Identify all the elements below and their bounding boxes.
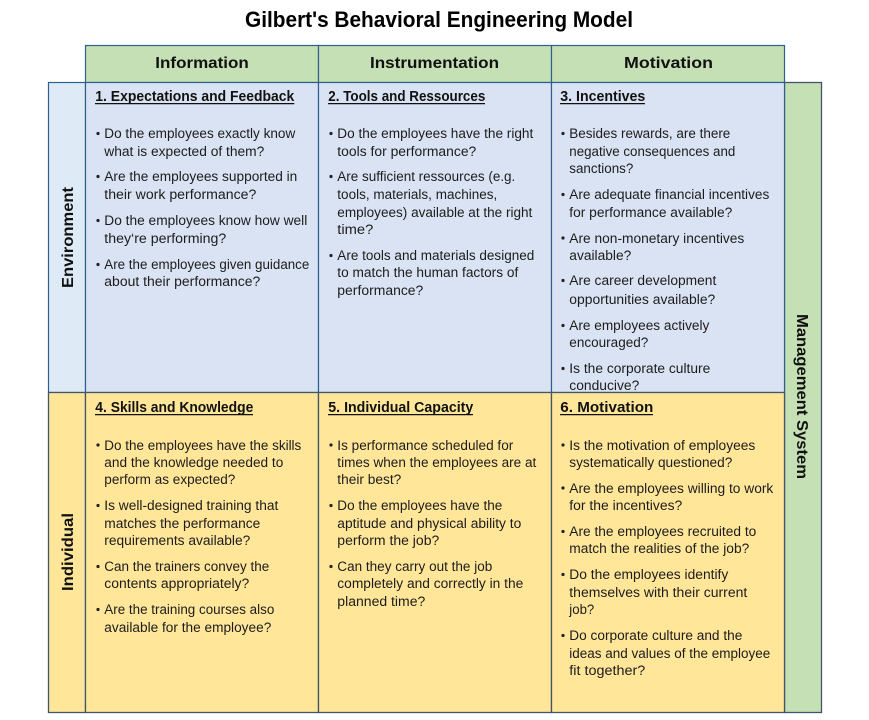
heading: cell 1: 1. Expectations and Feedback — [95, 89, 295, 105]
side header: Management System — [784, 82, 822, 712]
bullet list: cell 6: systematically questioned? — [569, 455, 732, 470]
bullet list: cell 6: Is the motivation of employees — [569, 438, 756, 453]
bullet list: cell 4: requirements available? — [104, 533, 250, 548]
bullet list: cell 2: Do the employees have the right — [337, 126, 534, 141]
bullet list: cell 6: Do corporate culture and the — [569, 628, 742, 643]
row header: Environment: Environment — [60, 186, 77, 288]
heading: cell 5: 5. Individual Capacity — [328, 400, 473, 416]
bullet list: cell 3: sanctions? — [569, 161, 633, 176]
panel: 1. Expectations and Feedback — [86, 82, 318, 392]
bullet list: cell 2: tools, materials, machines, — [337, 187, 497, 202]
heading: cell 2: 2. Tools and Ressources — [328, 89, 485, 105]
bullet list: cell 6: ideas and values of the employee — [569, 646, 770, 661]
bullet list: cell 3: Are non-monetary incentives — [569, 231, 745, 246]
bullet list: cell 6: match the realities of the job? — [569, 541, 749, 556]
bullet list: cell 6: Are the employees recruited to — [569, 524, 756, 539]
column header: Information: Information — [155, 55, 249, 72]
bullet list: cell 4: contents appropriately? — [104, 576, 249, 591]
column header: Instrumentation — [318, 46, 552, 82]
bullet list: cell 4: Do the employees have the skills — [104, 438, 302, 453]
bullet list: cell 6 — [561, 438, 774, 678]
bullet list: cell 6: Are the employees willing to work — [569, 481, 774, 496]
bullet list: cell 4: Are the training courses also — [104, 602, 274, 617]
bullet list: cell 2: time? — [337, 222, 373, 237]
bullet list: cell 1: about their performance? — [104, 274, 260, 289]
panel: 3. Incentives — [552, 82, 784, 393]
bullet list: cell 2 — [329, 126, 534, 298]
bullet list: cell 6: themselves with their current — [569, 585, 748, 600]
title: Gilbert's Behavioral Engineering Model — [245, 7, 633, 32]
bullet list: cell 3: for performance available? — [569, 205, 732, 220]
column header: Instrumentation: Instrumentation — [370, 55, 499, 72]
bullet list: cell 6: fit together? — [569, 663, 645, 678]
bullet list: cell 2: to match the human factors of — [337, 265, 519, 280]
side header: Management System: Management System — [793, 314, 810, 479]
bullet list: cell 4: Is well-designed training that — [104, 498, 279, 513]
heading: cell 4: 4. Skills and Knowledge — [95, 400, 253, 416]
bullet list: cell 3: Is the corporate culture — [569, 361, 710, 376]
bullet list: cell 6: for the incentives? — [569, 498, 682, 513]
bullet list: cell 6: Do the employees identify — [569, 567, 729, 582]
column header: Information — [86, 46, 318, 82]
heading: cell 6: 6. Motivation — [560, 400, 653, 416]
panel: 6. Motivation — [552, 392, 784, 712]
bullet list: cell 5: times when the employees are at — [337, 455, 537, 470]
bullet list: cell 1: Are the employees supported in — [104, 169, 297, 184]
bullet list: cell 3: Are career development — [569, 273, 717, 288]
column header: Motivation — [552, 46, 784, 82]
bullet list: cell 5: their best? — [337, 472, 401, 487]
column header: Motivation: Motivation — [624, 55, 713, 72]
bullet list: cell 1: their work performance? — [104, 187, 256, 202]
bullet list: cell 4: Can the trainers convey the — [104, 559, 269, 574]
bullet list: cell 2: Are sufficient ressources (e.g. — [337, 169, 515, 184]
bullet list: cell 4: and the knowledge needed to — [104, 455, 283, 470]
bullet list: cell 1: Do the employees know how well — [104, 213, 307, 228]
bullet list: cell 5: completely and correctly in the — [337, 576, 523, 591]
bullet list: cell 5: Do the employees have the — [337, 498, 502, 513]
row header: Individual — [48, 392, 86, 712]
bullet list: cell 3: Are adequate financial incentives — [569, 187, 770, 202]
bullet list: cell 6: job? — [568, 602, 594, 617]
panel: 2. Tools and Ressources — [318, 82, 552, 392]
bullet list: cell 5: perform the job? — [337, 533, 439, 548]
bullet list: cell 4: available for the employee? — [104, 620, 271, 635]
bullet list: cell 2: tools for performance? — [337, 144, 476, 159]
bullet list: cell 1: Are the employees given guidance — [104, 257, 309, 272]
bullet list: cell 3: Are employees actively — [569, 318, 710, 333]
bullet list: cell 3: conducive? — [569, 378, 639, 393]
row header: Environment — [48, 82, 86, 392]
row header: Individual: Individual — [60, 513, 77, 591]
bullet list: cell 2: Are tools and materials designed — [337, 248, 534, 263]
bullet list: cell 5: Can they carry out the job — [337, 559, 492, 574]
panel: 4. Skills and Knowledge — [86, 392, 318, 712]
bullet list: cell 3: Besides rewards, are there — [569, 126, 730, 141]
bullet list: cell 3: opportunities available? — [569, 292, 715, 307]
bullet list: cell 3: available? — [569, 248, 631, 263]
bullet list: cell 4 — [96, 438, 302, 635]
bullet list: cell 1: Do the employees exactly know — [104, 126, 296, 141]
bullet list: cell 3 — [561, 126, 770, 393]
bullet list: cell 5: aptitude and physical ability to — [337, 516, 521, 531]
bullet list: cell 2: performance? — [337, 283, 423, 298]
heading: cell 3: 3. Incentives — [560, 89, 645, 105]
bullet list: cell 5: planned time? — [337, 594, 425, 609]
panel: 5. Individual Capacity — [318, 392, 552, 712]
bullet list: cell 2: employees) available at the right — [337, 205, 533, 220]
bullet list: cell 4: perform as expected? — [104, 472, 235, 487]
bullet list: cell 1: what is expected of them? — [103, 144, 264, 159]
bullet list: cell 5 — [329, 438, 537, 609]
bullet list: cell 5: Is performance scheduled for — [337, 438, 514, 453]
bullet list: cell 1 — [96, 126, 309, 289]
bullet list: cell 4: matches the performance — [104, 516, 260, 531]
bullet list: cell 1: they‘re performing? — [104, 231, 226, 246]
bullet list: cell 3: negative consequences and — [569, 144, 735, 159]
bullet list: cell 3: encouraged? — [569, 335, 648, 350]
